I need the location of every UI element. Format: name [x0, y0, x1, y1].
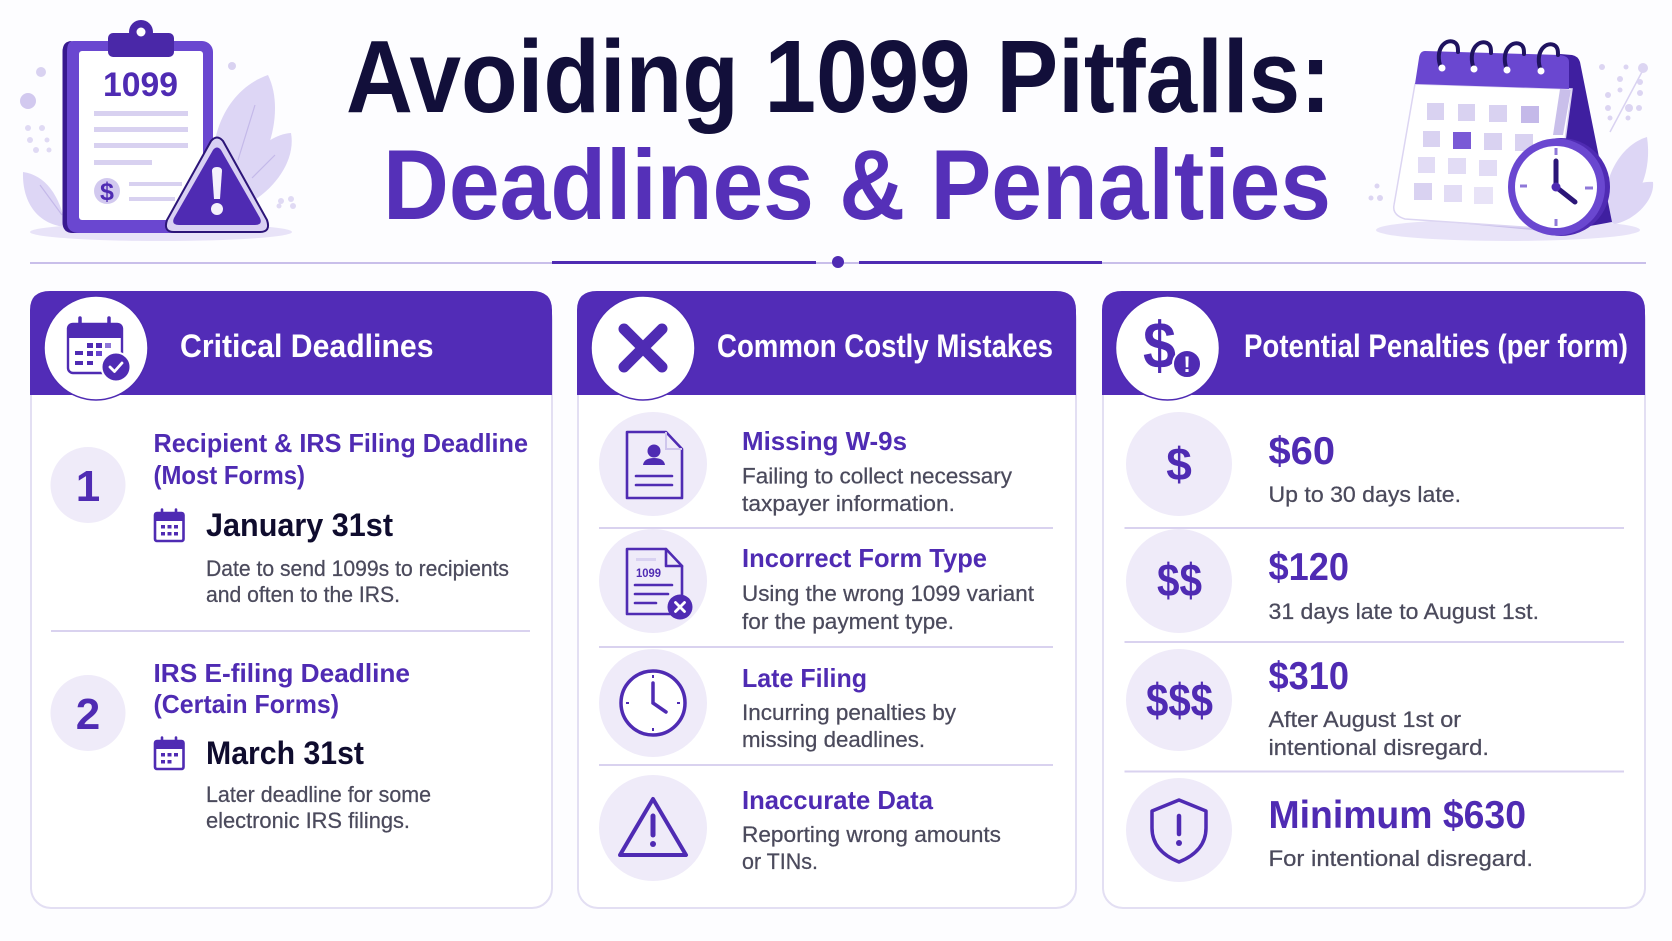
deadline 1 description: Date to send 1099s to recipients: [206, 556, 509, 581]
panel title: Common Costly Mistakes: [717, 328, 1053, 364]
number badge 1: 1: [76, 462, 100, 511]
clipboard dollar: $: [100, 178, 114, 206]
number badge 1: [50, 447, 126, 523]
description: [742, 700, 956, 752]
deadline 2 description: electronic IRS filings.: [206, 808, 410, 833]
mistake: late filing: [599, 649, 956, 757]
description: or TINs.: [742, 849, 818, 874]
description: intentional disregard.: [1268, 735, 1489, 760]
amount: Minimum $630: [1268, 794, 1526, 837]
header icon: X: [591, 296, 695, 400]
icon: single dollar: $: [1166, 438, 1192, 490]
description: [742, 822, 1001, 874]
title: [346, 19, 1331, 240]
heading: Incorrect Form Type: [742, 543, 987, 573]
penalty: minimum $630: [1126, 778, 1533, 882]
mistake: missing W-9s: [599, 412, 1012, 516]
icon: 1099 form with x: 1099: [636, 568, 661, 580]
deadline 2 heading: IRS E-filing Deadline: [154, 658, 410, 688]
icon: triple dollar: $$$: [1146, 674, 1213, 726]
amount: $60: [1268, 430, 1335, 473]
deadline 2 description: Later deadline for some: [206, 782, 431, 807]
header divider: [30, 256, 1646, 268]
amount: $120: [1268, 546, 1349, 589]
icon: shield alert: [1126, 778, 1232, 882]
penalty: $60: [1126, 412, 1461, 516]
illustration: clipboard with warning: [20, 20, 296, 241]
date: January 31st: January 31st: [206, 507, 393, 543]
panel header bar: [577, 291, 1076, 395]
heading: Missing W-9s: [742, 426, 907, 456]
heading: Late Filing: [742, 663, 867, 693]
icon: 1099 form with x: [599, 529, 707, 633]
description: Using the wrong 1099 variant: [742, 581, 1034, 606]
icon: document with person: [599, 412, 707, 516]
header icon: dollar with alert: $: [1143, 308, 1176, 382]
panel header bar: [1102, 291, 1645, 395]
panel title: Critical Deadlines: [180, 328, 434, 364]
header icon: dollar with alert: !: [1183, 352, 1191, 377]
icon: double dollar: $$: [1157, 554, 1202, 606]
description: For intentional disregard.: [1268, 846, 1533, 871]
deadline 1 heading: (Most Forms): [154, 460, 305, 490]
description: Failing to collect necessary: [742, 464, 1012, 488]
deadline 1 description: [206, 556, 509, 607]
icon: calendar: [155, 510, 184, 541]
deadline 2 heading: [154, 658, 410, 719]
mistake: incorrect form type: [599, 529, 1034, 634]
deadline 2 heading: (Certain Forms): [154, 689, 339, 719]
description: for the payment type.: [742, 609, 954, 634]
description: 31 days late to August 1st.: [1268, 599, 1539, 624]
date: March 31st: March 31st: [206, 735, 364, 771]
penalty: $310: [1126, 649, 1489, 760]
number badge 2: 2: [76, 690, 100, 739]
number badge 2: [50, 675, 126, 751]
title line 1: Avoiding 1099 Pitfalls:: [346, 19, 1331, 134]
header icon: dollar with alert: [1116, 296, 1220, 400]
amount: $310: [1268, 655, 1349, 698]
deadline 1 heading: [154, 428, 528, 490]
icon: single dollar: [1126, 412, 1232, 516]
description: [1268, 707, 1489, 760]
description: Incurring penalties by: [742, 700, 956, 725]
panel header bar: [30, 291, 552, 395]
icon: warning triangle: [599, 775, 707, 881]
icon: calendar: [155, 738, 184, 769]
heading: Inaccurate Data: [742, 785, 934, 815]
icon: clock: [599, 649, 707, 757]
panel: critical deadlines: [30, 291, 552, 908]
deadline 2 description: [206, 782, 431, 833]
clipboard label 1099: 1099: [103, 66, 178, 104]
icon: triple dollar: [1126, 649, 1232, 751]
description: After August 1st or: [1268, 707, 1461, 732]
penalty: $120: [1126, 529, 1539, 633]
description: [742, 464, 1012, 516]
header icon: calendar check: [44, 296, 148, 400]
panel: potential penalties: [1102, 291, 1645, 908]
description: Reporting wrong amounts: [742, 822, 1001, 847]
deadline 1 heading: Recipient & IRS Filing Deadline: [154, 428, 528, 458]
illustration: calendar with clock: [1368, 41, 1653, 241]
panel: common costly mistakes: [577, 291, 1076, 908]
icon: double dollar: [1126, 529, 1232, 633]
description: missing deadlines.: [742, 727, 925, 752]
description: Up to 30 days late.: [1268, 482, 1461, 507]
deadline 1 description: and often to the IRS.: [206, 582, 400, 607]
title line 2: Deadlines & Penalties: [383, 129, 1331, 240]
description: taxpayer information.: [742, 491, 955, 516]
mistake: inaccurate data: [599, 775, 1001, 881]
description: [742, 581, 1034, 634]
